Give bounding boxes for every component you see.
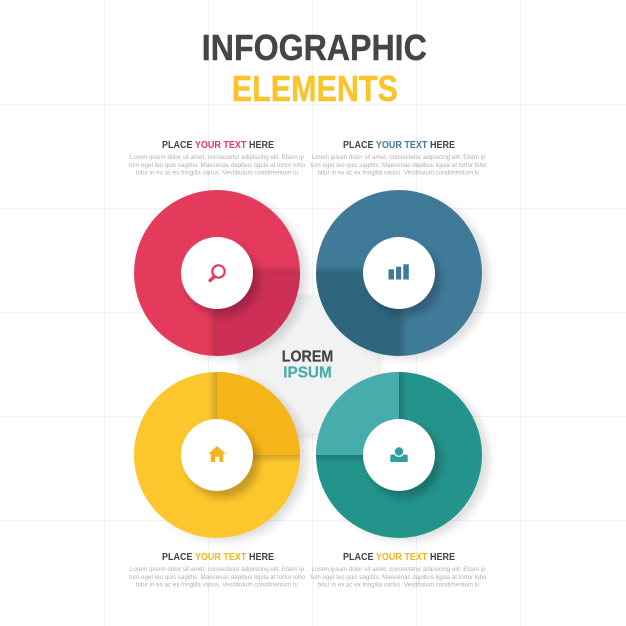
text block: top left: bitur in ex ac ex fringilla varius. Vestibulum condimentum lu <box>136 170 298 176</box>
circle: red <box>134 190 307 359</box>
text block: top left: Lorem ipsum dolor sit amet, consectetur adipiscing elit. Etiam ip <box>130 154 304 161</box>
text block: top left: tum eget leo quis sagittis. Maecenas dapibus ligula at tortor lobo <box>129 162 305 169</box>
text block: top right: bitur in ex ac ex fringilla varius. Vestibulum condimentum lu <box>318 170 480 176</box>
text block: bottom right: PLACE YOUR TEXT HERE <box>343 552 455 563</box>
circle: blue <box>315 190 489 359</box>
inner circle: red <box>181 237 253 309</box>
text block: bottom left: Lorem ipsum dolor sit amet, consectetur adipiscing elit. Etiam ip <box>130 566 304 573</box>
title <box>202 27 427 109</box>
text block: bottom right <box>310 552 487 588</box>
center label: IPSUM <box>283 364 332 382</box>
center label <box>282 348 333 382</box>
text block: top right: tum eget leo quis sagittis. Maecenas dapibus ligula at tortor lobo <box>310 162 487 169</box>
inner circle: teal <box>363 419 435 491</box>
text block: bottom right: bitur in ex ac ex fringilla varius. Vestibulum condimentum lu <box>318 582 480 588</box>
text block: bottom left <box>129 552 305 588</box>
title: INFOGRAPHIC <box>202 27 427 68</box>
text block: bottom left: tum eget leo quis sagittis. Maecenas dapibus ligula at tortor lobo <box>129 574 305 581</box>
text block: bottom left: bitur in ex ac ex fringilla varius. Vestibulum condimentum lu <box>136 582 298 588</box>
center square <box>238 295 380 437</box>
text block: top right <box>310 140 487 176</box>
circle: yellow <box>134 371 307 541</box>
text block: bottom right: Lorem ipsum dolor sit amet, consectetur adipiscing elit. Etiam ip <box>312 566 486 573</box>
text block: top left <box>129 140 305 176</box>
circle: teal <box>315 371 489 541</box>
inner circle: yellow <box>181 419 253 491</box>
icon: magnifier <box>210 265 225 280</box>
text block: top left: PLACE YOUR TEXT HERE <box>162 140 274 151</box>
text block: bottom left: PLACE YOUR TEXT HERE <box>162 552 274 563</box>
inner circle: blue <box>363 237 435 309</box>
text block: top right: Lorem ipsum dolor sit amet, consectetur adipiscing elit. Etiam ip <box>312 154 486 161</box>
text block: top right: PLACE YOUR TEXT HERE <box>343 140 455 151</box>
icon: house <box>208 446 226 462</box>
center label: LOREM <box>282 348 333 366</box>
icon: person <box>390 447 408 462</box>
text block: bottom right: tum eget leo quis sagittis. Maecenas dapibus ligula at tortor lobo <box>310 574 487 581</box>
title: ELEMENTS <box>232 68 398 109</box>
icon: bar chart <box>388 264 409 280</box>
